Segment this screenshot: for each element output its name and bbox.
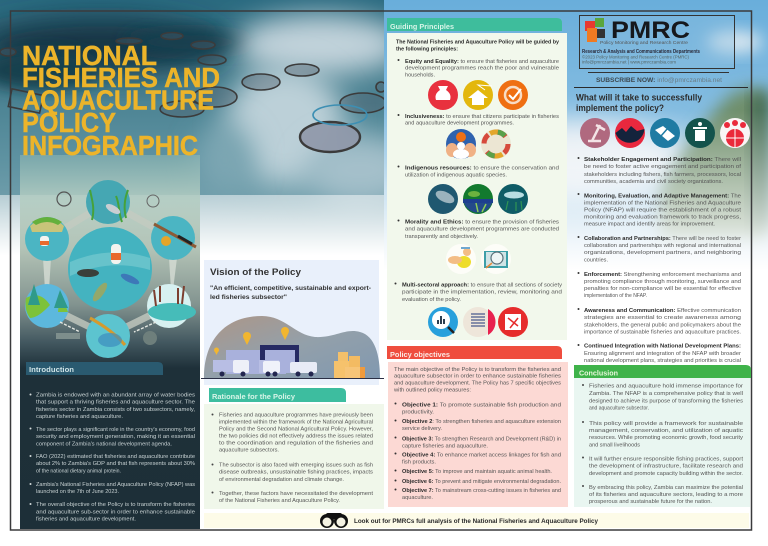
text block: equity and equality: Equity and Equality: to ensure that fisheries and aquaculture <box>405 59 559 65</box>
text block: multi-sectoral approach <box>394 282 563 303</box>
text block: introduction bullets: of the national dietary animal protein. <box>36 469 121 475</box>
list: seven objectives: Objective 1: To promote sustainable fish production and <box>402 402 561 408</box>
item: enforcement: promoting compliance through monitoring, surveillance and <box>584 279 741 285</box>
text block: conclusion bullets: and small livelihoods <box>589 442 640 448</box>
text block: PMRC department and contact <box>582 49 700 64</box>
text block: implementation measures <box>578 157 742 364</box>
panel: conclusion <box>574 365 751 507</box>
text block: introduction bullets: The overall objective of the Policy is to transform the fisheries <box>36 502 196 508</box>
text block: conclusion bullets: By embracing this policy, Zambia can maximize the potential <box>589 485 743 491</box>
title: INFOGRAPHIC <box>22 130 198 161</box>
text block: introduction bullets: about 2% to Zambia's GDP and that fish represents about 30% <box>36 461 196 467</box>
text block: main objective: The main objective of the Policy is to transform the fisheries and <box>394 367 561 373</box>
item: continued integration: national development plans, strategies and priorities is crucial <box>584 358 741 364</box>
text block: rationale bullets: the two policies did not effectively address the issues related <box>219 434 373 440</box>
text block: inclusiveness: and aquaculture development programmes. <box>405 121 514 127</box>
list: seven objectives: Objective 6: To prevent and mitigate environmental degradation. <box>402 479 561 485</box>
item: awareness: stakeholders, the general public and policymakers about the <box>584 322 741 328</box>
item: continued integration <box>584 344 741 364</box>
heading: what will it take <box>576 92 703 113</box>
text block: conclusion bullets: of its fisheries and aquaculture sectors, leading to a more <box>589 492 743 498</box>
illustration: fishing and aquaculture circles <box>25 180 196 358</box>
icons: ethics row <box>446 244 511 274</box>
text block: introduction bullets: FAO (2022) estimated that fisheries and aquaculture contribute <box>36 454 195 460</box>
text block: conclusion bullets: and aquaculture subsector. <box>589 405 649 411</box>
text block: guiding principles intro <box>396 40 559 53</box>
quote: vision statement: "An efficient, competitive, sustainable and export- <box>210 285 371 292</box>
text block: introduction bullets: launched on the 7th of June 2023. <box>36 489 119 495</box>
item: awareness: Awareness and Communication: Effective communication <box>584 308 741 314</box>
text block: morality and ethics: transparently and objectively. <box>405 234 478 240</box>
item: stakeholder engagement: Stakeholder Engagement and Participation: There will <box>584 157 741 163</box>
background photo: sky and mountain <box>384 0 768 254</box>
text block: conclusion bullets: Fisheries and aquaculture hold immense importance for <box>589 384 743 390</box>
text block: rationale bullets: Policy and the Second National Agricultural Policy. However, <box>219 427 373 433</box>
list: seven objectives: Objective 7: To mainstream cross-cutting issues in fisheries and <box>402 488 561 494</box>
text block: inclusiveness: Inclusiveness: to ensure that citizens participate in fisheries <box>405 114 559 120</box>
panel: policy objectives <box>387 346 568 507</box>
heading: what will it take: What will it take to successfully <box>576 92 703 102</box>
callout: subscribe: SUBSCRIBE NOW: info@pmrczambia.net <box>596 77 722 84</box>
list: seven objectives: Objective 2 : To strengthen fisheries and aquaculture extension <box>402 419 561 425</box>
title <box>22 40 220 161</box>
text block: conclusion bullets <box>582 384 744 505</box>
item: collaboration: organizations, development partners, and neighboring <box>584 250 741 256</box>
text block: conclusion bullets: Zambia. The NFAP is a comprehensive policy that is well <box>589 391 743 397</box>
text block: PMRC department and contact: info@pmrczambia.net | www.pmrczambia.com <box>582 60 676 64</box>
list: seven objectives: productivity. <box>402 409 434 415</box>
list: seven objectives: service delivery. <box>402 426 442 432</box>
item: stakeholder engagement: communities, academia and civil society organizations. <box>584 179 723 185</box>
panel: vision of the policy <box>201 260 384 385</box>
heading: rationale <box>209 388 346 402</box>
text block: introduction bullets: and aquaculture sub-sector in order to enhance sustainable <box>36 509 195 515</box>
text block: introduction bullets: The sector plays a significant role in the country's economy, food <box>36 427 195 433</box>
heading: conclusion: Conclusion <box>579 368 618 378</box>
heading: policy objectives <box>387 346 562 359</box>
panel: title and introduction column <box>20 155 200 529</box>
text block: conclusion bullets: prosperous and sustainable future for the nation. <box>589 499 712 505</box>
icon: fish cages <box>0 32 386 152</box>
text block: rationale bullets: of environmental degradation and climate change. <box>219 477 344 483</box>
item: awareness: strategies are essential to create awareness among <box>584 315 741 321</box>
text block: rationale bullets: Fisheries and aquaculture programmes have previously been <box>219 413 373 419</box>
item: monitoring and evaluation <box>584 193 742 228</box>
item: collaboration: Collaboration and Partnerships: There will be need to foster <box>584 236 741 242</box>
text block: introduction bullets <box>30 392 196 522</box>
text block: guiding principles intro: the following principles: <box>396 47 458 53</box>
icons: inclusiveness row <box>446 129 511 159</box>
text block: morality and ethics: and aquaculture development programmes are conducted <box>405 227 559 233</box>
list: seven objectives <box>394 402 561 501</box>
title: FISHERIES AND <box>22 62 220 93</box>
heading: policy objectives: Policy objectives <box>390 350 450 359</box>
text block: conclusion bullets: This policy will provide a framework for sustainable <box>589 421 743 427</box>
item: enforcement: implementation of the NFAP. <box>584 293 647 299</box>
quote: vision statement <box>210 285 371 301</box>
text block: conclusion bullets: It will further ensure responsible fishing practices, support <box>589 456 744 462</box>
text block: indigenous resources: Indigenous resources: to ensure the conservation and <box>405 165 559 171</box>
text block: conclusion bullets: designed to achieve its purpose of transforming the fisheries <box>589 398 743 404</box>
icons: implementation row <box>580 118 750 148</box>
text block: rationale bullets: disease outbreaks, unsustainable fishing practices, impacts <box>219 470 374 476</box>
text block: introduction bullets: security and employment generation, making it an essential <box>36 434 195 440</box>
text block: equity and equality: development programmes reach the poor and vulnerable <box>405 65 559 71</box>
text block: indigenous resources: utilization of indigenous aquatic species. <box>405 173 507 179</box>
heading: guiding principles: Guiding Principles <box>390 22 454 31</box>
text block: conclusion bullets: development and promote capacity building within the sector. <box>589 471 743 477</box>
text block: main objective <box>394 367 562 393</box>
text block: rationale bullets: to the coordination and regulation of the fisheries and <box>219 440 373 446</box>
text block: multi-sectoral approach: participate in the implementation, review, monitoring and <box>402 290 562 296</box>
item: enforcement <box>584 272 741 299</box>
text block: rationale bullets: Together, these factors have necessitated the development <box>219 491 374 497</box>
item: monitoring and evaluation: measure impact and identify areas for improvement. <box>584 222 715 228</box>
heading: vision: Vision of the Policy <box>210 267 302 278</box>
text block: introduction bullets: capture fisheries and aquaculture. <box>36 414 123 420</box>
text block: introduction bullets: component of Zambia's national development agenda. <box>36 441 172 447</box>
text block: morality and ethics: Morality and Ethics: to ensure the provision of fisheries <box>405 220 560 226</box>
item: enforcement: Enforcement: Strengthening enforcement mechanisms and <box>584 272 741 278</box>
list: seven objectives: Objective 5: To improve and maintain aquatic animal health. <box>402 469 552 475</box>
item: continued integration: Continued Integration with National Development Plans: <box>584 344 741 350</box>
icon: PMRC logo: PMRC <box>611 17 690 44</box>
text block: PMRC department and contact: Research & Analysis and Communications Departments <box>582 49 700 55</box>
heading: rationale: Rationale for the Policy <box>212 392 296 401</box>
item: monitoring and evaluation: Monitoring, Evaluation, and Adaptive Management: The <box>584 193 741 199</box>
item: awareness: importance of sustainable fisheries and aquaculture practices. <box>584 330 741 336</box>
list: seven objectives: aquaculture. <box>402 495 433 501</box>
text block: morality and ethics <box>398 220 560 240</box>
list: seven objectives: capture fisheries and aquaculture. <box>402 443 488 449</box>
icons: equity row <box>428 80 528 110</box>
item: stakeholder engagement <box>584 157 742 185</box>
background photo: fish farm cages on water <box>0 0 384 247</box>
list: seven objectives: Objective 3: To strengthen Research and Development (R&D) in <box>402 436 561 442</box>
text block: multi-sectoral approach: Multi-sectoral approach: to ensure that all sections of society <box>402 283 563 289</box>
icon: PMRC logo <box>585 17 690 45</box>
text block: conclusion bullets: management, conservation, and utilization of aquatic <box>589 428 744 434</box>
panel: guiding principles <box>387 18 567 340</box>
heading: introduction: Introduction <box>29 365 74 374</box>
text block: introduction bullets: Zambia is endowed with an abundant array of water bodies <box>36 392 196 398</box>
item: enforcement: penalties for non-compliance will be essential for effective <box>584 286 741 292</box>
text block: conclusion bullets: resources. While promoting economic growth, food security <box>589 435 744 441</box>
icon: PMRC logo: Policy Monitoring and Research Centre <box>600 40 689 45</box>
text block: rationale bullets: implemented within the framework of the National Agricultural <box>219 420 373 426</box>
panel: introduction <box>26 362 196 522</box>
item: continued integration: Ensuring alignment and integration of the NFAP with broader <box>584 351 741 357</box>
list: seven objectives: fish products. <box>402 460 436 466</box>
text block: equity and equality: households. <box>405 72 435 78</box>
text block: conclusion bullets: the development of infrastructure, facilitate research and <box>589 464 743 470</box>
text block: main objective: with outlined policy measures: <box>394 387 471 393</box>
text block: rationale bullets: The subsector is also faced with emerging issues such as fish <box>219 463 373 469</box>
item: collaboration <box>584 236 741 263</box>
title: AQUACULTURE <box>22 84 214 116</box>
item: stakeholder engagement: be need to foster active engagement and participation of <box>584 164 742 170</box>
text block: inclusiveness <box>398 114 559 127</box>
text block: rationale bullets <box>212 413 374 504</box>
text block: main objective: aquaculture subsector in order to enhance sustainable fisheries <box>394 373 562 379</box>
panel: PMRC logo and contact <box>580 16 734 68</box>
text block: indigenous resources <box>398 165 559 179</box>
text block: equity and equality <box>398 59 559 78</box>
text block: rationale bullets: of the National Fisheries and Aquaculture Policy. <box>219 498 340 504</box>
item: awareness <box>584 308 741 336</box>
icons: aquatic species row <box>428 184 528 214</box>
item: stakeholder engagement: stakeholders including fishers, fish farmers, processors, local <box>584 172 741 178</box>
text block: introduction bullets: fisheries sector in Zambia consists of two subsectors, namely, <box>36 407 195 413</box>
text block: multi-sectoral approach: evaluation of the policy. <box>402 297 461 303</box>
item: monitoring and evaluation: implementation of the National Fisheries and Aquaculture <box>584 200 741 206</box>
item: monitoring and evaluation: Policy (NFAP) will require the establishment of a robust <box>584 207 742 213</box>
text block: introduction bullets: Zambia's National Fisheries and Aquaculture Policy (NFAP) was <box>36 482 195 488</box>
icons: multi-sectoral row <box>428 307 528 337</box>
quote: vision statement: led fisheries subsector" <box>210 294 287 301</box>
text block: introduction bullets: fisheries and aquaculture development. <box>36 516 136 522</box>
heading: guiding principles <box>387 18 562 31</box>
callout: look out for full analysis <box>204 513 749 528</box>
panel: rationale for the policy <box>204 388 384 509</box>
title: NATIONAL <box>22 40 157 71</box>
item: collaboration: collaboration and partnerships with regional and international <box>584 243 741 249</box>
text block: rationale bullets: aquaculture subsectors. <box>219 448 279 454</box>
heading: conclusion <box>574 365 751 378</box>
text block: guiding principles intro: The National Fisheries and Aquaculture Policy will be guided by <box>396 40 559 46</box>
text block: introduction bullets: that support a thriving fisheries and aquaculture sector. The <box>36 400 195 406</box>
title: POLICY <box>22 107 116 138</box>
list: seven objectives: Objective 4: To enhance market access linkages for fish and <box>402 452 561 458</box>
text block: main objective: and aquaculture development. The Policy has 7 specific objectives <box>394 380 561 386</box>
item: collaboration: countries. <box>584 257 608 263</box>
text block: PMRC department and contact: ©2023 Policy Monitoring and Research Centre (PMRC) <box>582 54 689 60</box>
heading: what will it take: implement the policy? <box>576 102 664 113</box>
heading: introduction <box>26 362 163 375</box>
icon: binoculars <box>320 513 348 528</box>
item: monitoring and evaluation: monitoring and evaluation framework to track progress, <box>584 214 741 220</box>
illustration: logistics trucks over fish landscape <box>204 316 380 378</box>
callout: look out for full analysis: Look out for PMRCs full analysis of the National Fisheries and Aquaculture Policy <box>354 518 598 525</box>
